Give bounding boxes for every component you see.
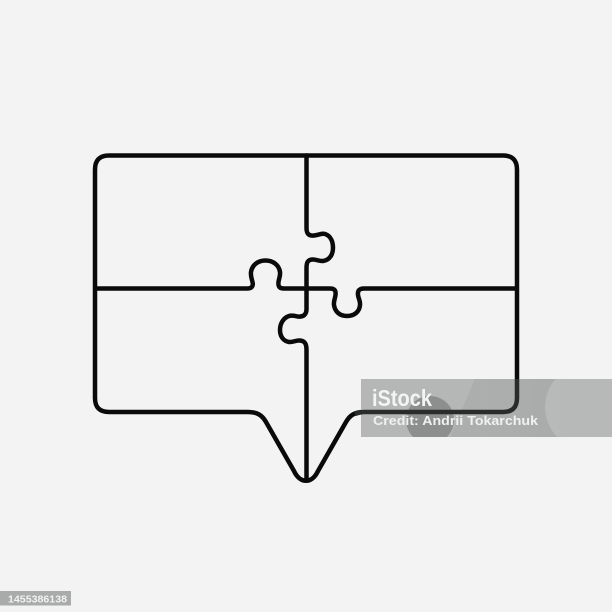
bubble outline xyxy=(95,156,517,481)
horizontal puzzle seam xyxy=(96,260,516,316)
icon: puzzle speech bubble xyxy=(95,156,517,481)
watermark band xyxy=(354,379,612,437)
image id number: 1455386138 xyxy=(8,594,67,606)
vertical puzzle seam xyxy=(280,156,333,480)
bubble line under watermark xyxy=(355,379,517,414)
image id tag xyxy=(0,591,71,606)
watermark shapes xyxy=(361,379,612,437)
watermark: credit: Credit: Andrii Tokarchuk xyxy=(373,413,539,428)
watermark: iStock logo: iStock xyxy=(372,385,432,411)
